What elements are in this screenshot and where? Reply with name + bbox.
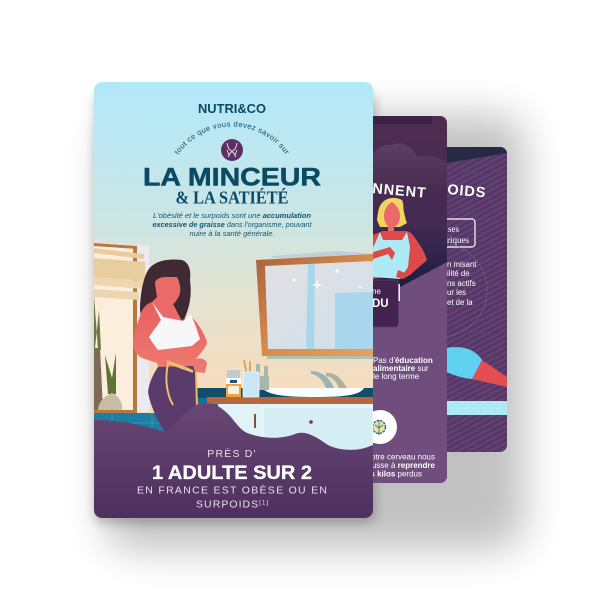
illustration: mirror (256, 251, 373, 359)
illustration: woman (133, 260, 207, 435)
intro text: nuire à la santé générale. (190, 229, 274, 238)
dark callout box: DU (372, 298, 389, 310)
arms and torso (133, 302, 207, 373)
outlined label box: ses (448, 224, 459, 234)
heading fragment: OIDS (447, 182, 487, 201)
text: education: alimentaire sur (373, 364, 429, 373)
illustration: window (94, 240, 149, 413)
subtitle: & LA SATIÉTÉ (176, 188, 288, 208)
top (149, 302, 200, 350)
toothbrushes (244, 360, 250, 376)
intro text: L'obésité et le surpoids sont une accumulation (153, 211, 311, 220)
callout text: SURPOIDS (196, 498, 258, 510)
callout text: EN FRANCE EST OBÈSE OU EN (137, 484, 327, 496)
title: LA MINCEUR (143, 164, 321, 192)
intro text (152, 211, 312, 238)
text: brain: pousse à reprendre (363, 461, 436, 470)
icon: brain (373, 410, 397, 444)
dark callout box (373, 280, 400, 328)
outlined label box (447, 218, 476, 248)
icon: silhouette (221, 139, 243, 161)
body text: ns actifs (447, 279, 476, 288)
panel: back card (447, 147, 507, 452)
illustration: floor tiles (94, 388, 373, 432)
text: brain (373, 454, 435, 478)
callout text (137, 447, 327, 510)
dotted circle (447, 243, 488, 337)
dark callout box: ne (372, 287, 381, 296)
text: education: Pas d'éducation (373, 356, 433, 365)
body text: ur les (447, 288, 466, 297)
outlined label box: riques (447, 235, 469, 245)
illustration: vanity (207, 360, 373, 454)
callout text: [1] (259, 500, 268, 506)
wall background (94, 82, 373, 518)
card header band (447, 147, 507, 163)
cup (243, 372, 259, 397)
trousers (148, 366, 197, 435)
body text: n misant (447, 260, 477, 269)
panel: middle card (373, 116, 447, 483)
body text (447, 260, 477, 307)
body text: ilité de (447, 269, 470, 278)
key figure: 1 ADULTE SUR 2 (152, 462, 312, 484)
text: education: le long terme (373, 372, 420, 381)
purple wave (94, 403, 373, 518)
measuring tape (166, 363, 197, 407)
callout text: PRÈS D' (207, 447, 257, 460)
logo: NUTRI&CO (198, 102, 266, 116)
faucet (311, 371, 334, 388)
body text: et de la (447, 298, 473, 307)
panel: front card (94, 82, 373, 518)
text: education (373, 356, 433, 381)
supplement jar (227, 370, 240, 378)
mirror sparkles (312, 280, 322, 290)
hair (140, 260, 191, 320)
cloud shape (373, 144, 447, 170)
illustration: woman thumbs down (370, 198, 427, 279)
text: brain: Votre cerveau nous (366, 452, 435, 462)
sink (262, 388, 364, 397)
text: brain: les kilos perdus (364, 470, 422, 478)
face and neck (152, 277, 182, 321)
illustration: plants (94, 295, 122, 410)
illustration: arm (447, 347, 507, 387)
heading fragment: NNENT (372, 181, 427, 202)
cyan band (447, 401, 507, 415)
intro text: excessive de graisse dans l'organisme, pouvant (152, 220, 312, 229)
lower panel (373, 262, 447, 483)
background shadow (94, 92, 525, 550)
arc heading: tout ce que vous devez savoir sur (174, 121, 289, 154)
